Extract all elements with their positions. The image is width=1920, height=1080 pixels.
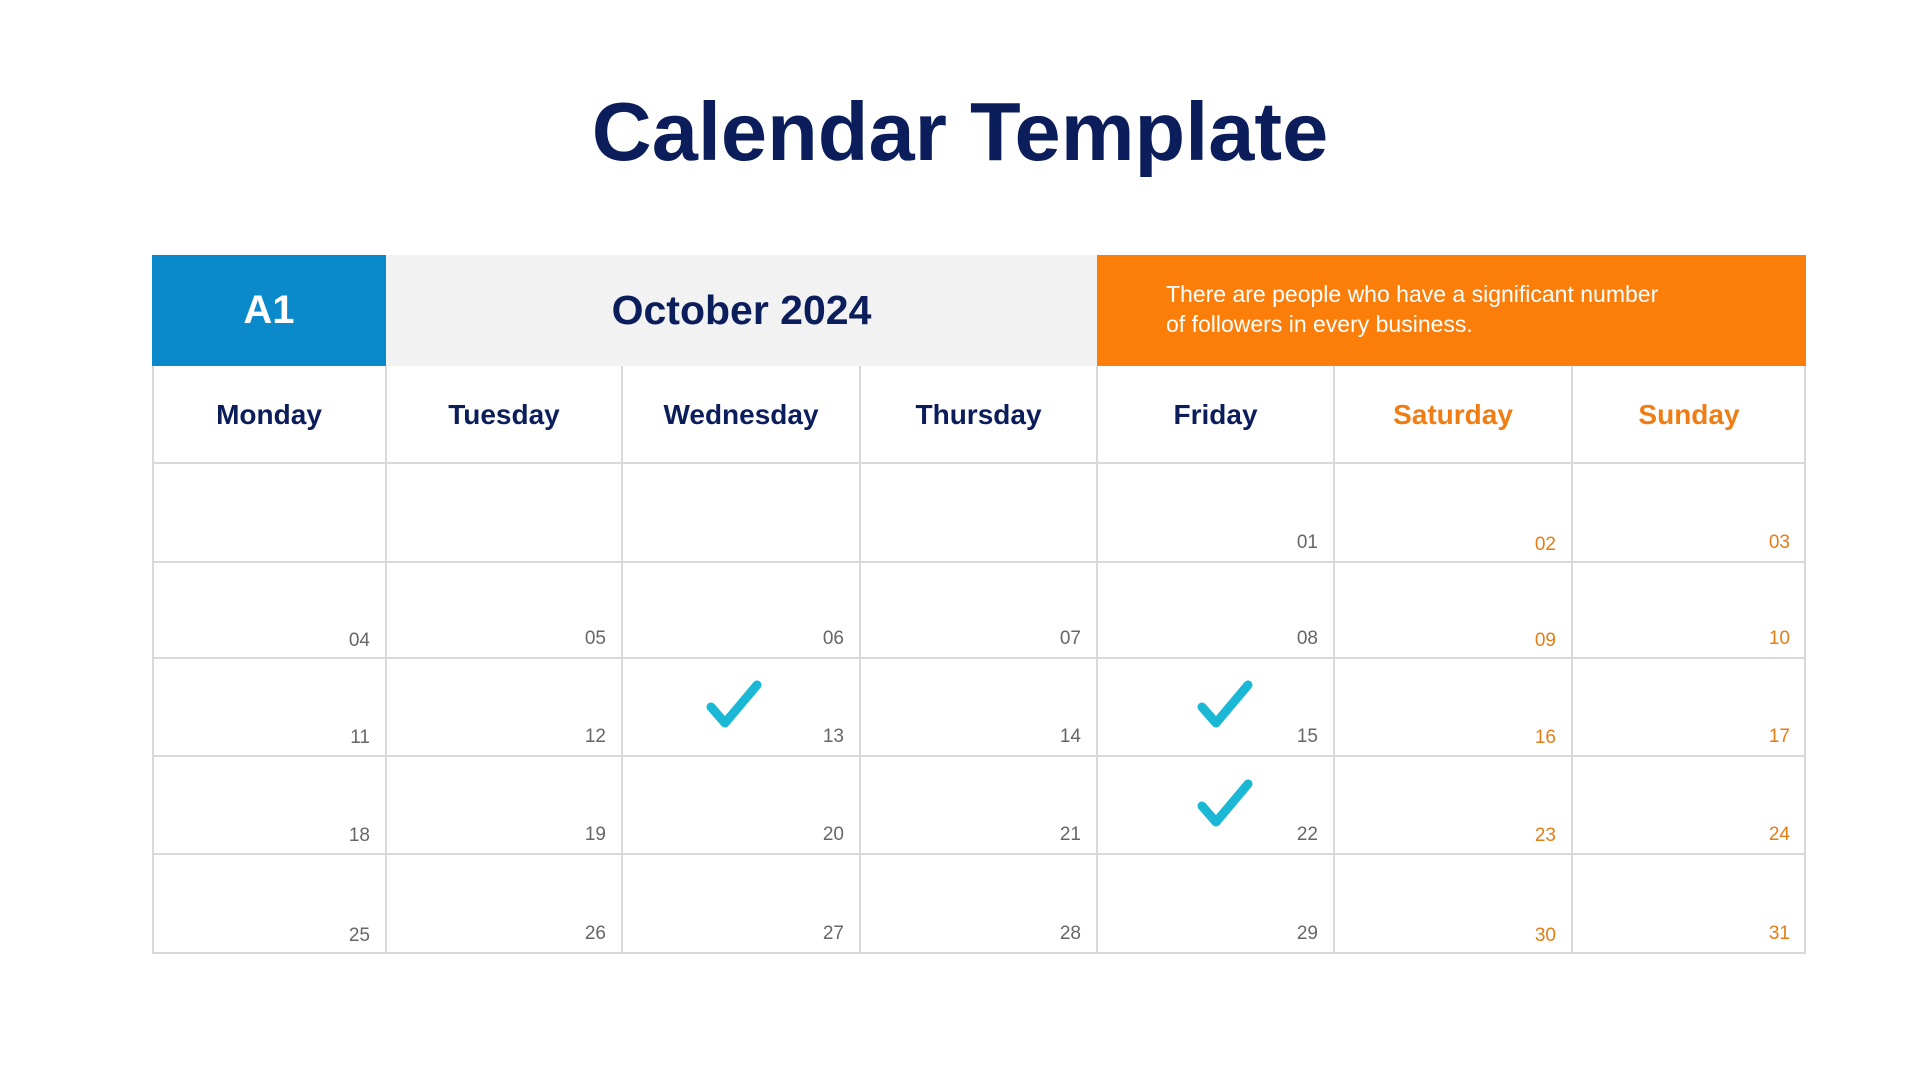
- calendar grid: 09: [1535, 630, 1556, 651]
- calendar grid: 04: [349, 630, 370, 651]
- calendar grid: 20: [823, 824, 844, 845]
- calendar grid: 15: [1297, 726, 1318, 747]
- icon: check 15: [1198, 680, 1252, 728]
- calendar grid: 25: [349, 925, 370, 946]
- header: note: [1097, 255, 1806, 366]
- calendar grid: 11: [350, 727, 370, 748]
- calendar grid: 05: [585, 628, 606, 649]
- calendar grid: 30: [1535, 925, 1556, 946]
- calendar grid: Tuesday: [448, 398, 560, 430]
- calendar grid: 08: [1297, 628, 1318, 649]
- calendar grid: 23: [1535, 825, 1556, 846]
- header: A1: [152, 255, 386, 366]
- calendar grid: 19: [585, 824, 606, 845]
- calendar grid: 28: [1060, 923, 1081, 944]
- calendar grid: 10: [1769, 628, 1790, 649]
- icon: check 22: [1198, 780, 1252, 826]
- title: Calendar Template: [592, 85, 1328, 178]
- calendar grid: 22: [1297, 824, 1318, 845]
- header: A1: A1: [243, 288, 295, 332]
- calendar grid: 07: [1060, 628, 1081, 649]
- calendar grid: Sunday: [1638, 398, 1740, 430]
- calendar grid: 26: [585, 923, 606, 944]
- header: month: [386, 255, 1097, 366]
- icon: check 13: [706, 680, 762, 728]
- header: month: October 2024: [612, 287, 871, 333]
- calendar grid: 13: [823, 726, 844, 747]
- calendar grid: Thursday: [915, 398, 1042, 430]
- header: note: of followers in every business.: [1166, 311, 1473, 337]
- calendar grid: 02: [1535, 534, 1556, 555]
- calendar grid: 27: [823, 923, 844, 944]
- calendar grid: 29: [1297, 923, 1318, 944]
- calendar grid: 24: [1769, 824, 1790, 845]
- calendar grid: 21: [1060, 824, 1081, 845]
- dates: [349, 532, 1790, 946]
- calendar grid: Friday: [1173, 398, 1258, 430]
- calendar grid: 18: [349, 825, 370, 846]
- calendar grid: 01: [1297, 532, 1318, 553]
- calendar grid: 03: [1769, 532, 1790, 553]
- calendar grid: Saturday: [1393, 398, 1513, 430]
- header: note: There are people who have a significant number: [1166, 281, 1658, 307]
- calendar grid: 16: [1535, 727, 1556, 748]
- calendar grid: Wednesday: [663, 398, 819, 430]
- calendar grid: 17: [1769, 726, 1790, 747]
- day names: [216, 398, 1740, 430]
- calendar grid: 12: [585, 726, 606, 747]
- calendar grid: 06: [823, 628, 844, 649]
- calendar grid: 14: [1060, 726, 1081, 747]
- calendar grid: Monday: [216, 398, 322, 430]
- calendar grid: 31: [1769, 923, 1790, 944]
